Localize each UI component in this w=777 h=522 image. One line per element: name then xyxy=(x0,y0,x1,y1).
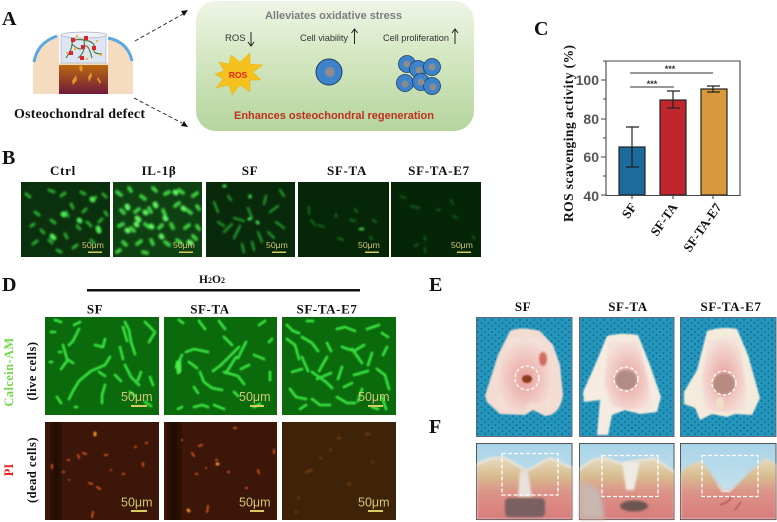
icon: proliferating cells xyxy=(396,56,440,94)
panel E titles: SF-TA-E7 xyxy=(701,299,761,314)
dashed region xyxy=(602,456,658,496)
x tick labels: SF xyxy=(618,200,639,221)
micrograph: SF-TA-E7 xyxy=(391,182,481,257)
y tick labels: 100 xyxy=(576,72,599,88)
label: cell viability up: Cell viability xyxy=(300,33,348,43)
H2O2 treatment header: H2O2 xyxy=(199,274,225,286)
x tick labels: SF-TA-E7 xyxy=(680,200,725,255)
micrograph: Ctrl xyxy=(21,182,110,257)
y tick labels: 40 xyxy=(583,188,599,204)
bar chart: ROS scavenging activity xyxy=(561,45,740,255)
micrograph: PI SF xyxy=(45,422,159,520)
panel B titles: IL-1β xyxy=(142,163,176,178)
scale bar: 50μm xyxy=(121,390,153,404)
photo: joint SF xyxy=(476,318,572,436)
photo: joint SF-TA xyxy=(580,318,674,436)
dashed region xyxy=(702,456,758,496)
panel label E: E xyxy=(429,274,442,296)
x tick labels xyxy=(618,200,725,255)
side label: PI dead cells: (dead cells) xyxy=(25,437,39,503)
micrograph: SF-TA xyxy=(298,182,389,257)
panel D titles: SF-TA-E7 xyxy=(297,302,357,316)
significance brackets xyxy=(630,64,713,89)
panel label A: A xyxy=(2,8,17,30)
y tick labels: 60 xyxy=(583,149,599,165)
icon: osteochondral defect with hydrogel xyxy=(33,32,133,94)
y tick labels: 80 xyxy=(583,111,599,127)
significance brackets: *** xyxy=(665,64,676,74)
scale bar: 50μm xyxy=(82,240,104,250)
panel E titles: SF-TA xyxy=(608,299,648,314)
micrograph: SF xyxy=(206,182,295,257)
scale bar: 50μm xyxy=(173,240,195,250)
panel B titles: SF xyxy=(242,163,258,178)
panel label F: F xyxy=(429,416,441,438)
micrograph: calcein SF-TA-E7 xyxy=(282,317,396,415)
scale bar: 50μm xyxy=(358,240,380,250)
micrograph: calcein SF-TA xyxy=(164,317,277,415)
panel D titles xyxy=(87,302,357,316)
x tick labels: SF-TA xyxy=(647,200,681,239)
side label: Calcein-AM live cells: Calcein-AM xyxy=(2,337,16,407)
photo: histology SF xyxy=(476,444,572,520)
label: cell proliferation up xyxy=(383,29,458,44)
panel E titles xyxy=(515,299,761,314)
scale bar: 50μm xyxy=(239,390,271,404)
label: ROS down xyxy=(225,32,254,46)
side label: Calcein-AM live cells xyxy=(2,337,39,407)
panel D titles: SF-TA xyxy=(190,302,230,316)
arrow: lower dashed xyxy=(134,98,188,127)
text: enhances osteochondral regeneration: Enhances osteochondral regeneration xyxy=(234,110,434,122)
panel B titles xyxy=(50,163,470,178)
photo: histology SF-TA xyxy=(580,444,674,520)
micrograph: PI SF-TA xyxy=(164,422,277,520)
scale bar: 50μm xyxy=(358,390,390,404)
panel B titles: SF-TA xyxy=(327,163,367,178)
side label: Calcein-AM live cells: (live cells) xyxy=(25,341,39,401)
side label: PI dead cells: PI xyxy=(2,464,16,476)
y axis title: ROS scavenging activity (%) xyxy=(561,45,576,222)
label: cell viability up xyxy=(300,29,358,44)
error bars xyxy=(626,86,720,167)
heading: alleviates oxidative stress: Alleviates oxidative stress xyxy=(265,10,402,22)
panel B titles: Ctrl xyxy=(50,163,76,178)
micrograph: calcein SF xyxy=(45,317,159,415)
bars xyxy=(619,89,727,195)
scale bar: 50μm xyxy=(239,496,271,510)
scale bar: 50μm xyxy=(451,240,473,250)
micrograph: PI SF-TA-E7 xyxy=(282,422,396,520)
panel label D: D xyxy=(2,274,16,296)
side label: PI dead cells xyxy=(2,437,39,503)
significance brackets: *** xyxy=(647,79,658,89)
panel E titles: SF xyxy=(515,299,531,314)
icon: ROS burst xyxy=(215,53,263,95)
dashed defect circle xyxy=(614,367,638,391)
scale bar: 50μm xyxy=(358,496,390,510)
photo: histology SF-TA-E7 xyxy=(680,444,776,520)
y tick labels xyxy=(576,72,599,204)
panel: mechanism summary xyxy=(196,1,474,131)
dashed defect circle xyxy=(712,371,736,395)
arrow: upper dashed xyxy=(135,10,188,41)
label: ROS down: ROS xyxy=(225,33,246,44)
dashed defect circle xyxy=(515,366,539,390)
scale bar: 50μm xyxy=(121,496,153,510)
icon: single cell xyxy=(316,59,342,85)
panel D titles: SF xyxy=(87,302,103,316)
axes xyxy=(601,61,740,199)
text: Osteochondral defect: Osteochondral defect xyxy=(14,107,145,122)
icon: ROS burst: ROS xyxy=(229,70,248,80)
panel B titles: SF-TA-E7 xyxy=(408,163,470,178)
panel label B: B xyxy=(2,147,15,169)
panel label C: C xyxy=(534,18,548,40)
micrograph: IL-1β xyxy=(113,182,202,257)
dashed region xyxy=(502,454,558,495)
photo: joint SF-TA-E7 xyxy=(680,318,776,436)
scale bar: 50μm xyxy=(266,240,288,250)
label: cell proliferation up: Cell proliferation xyxy=(383,33,449,43)
